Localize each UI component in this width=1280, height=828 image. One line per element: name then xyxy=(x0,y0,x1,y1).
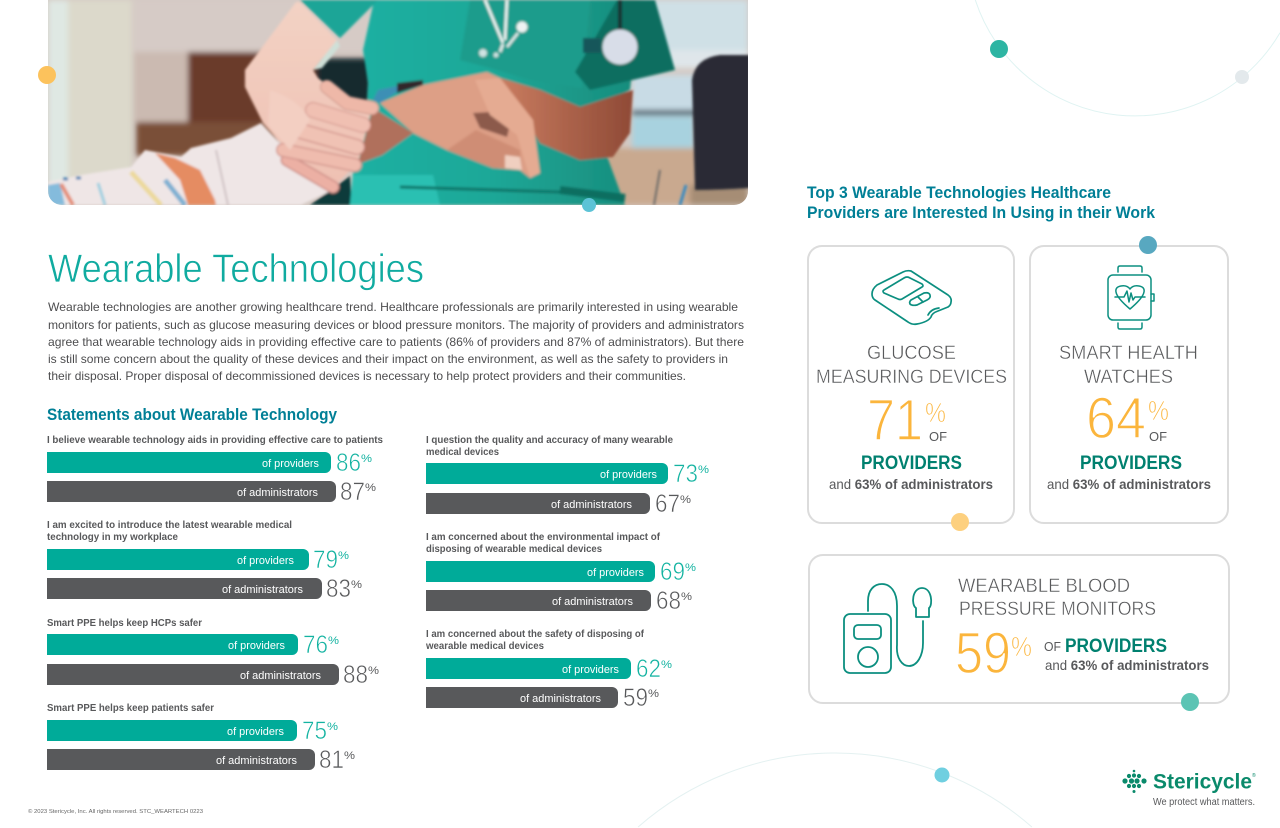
dot: grey xyxy=(1235,70,1249,84)
chart: statement 6: disposing of wearable medical devices xyxy=(426,544,602,555)
logo: Stericycle: Stericycle xyxy=(1153,770,1252,794)
chart: statement 5: 67 xyxy=(655,490,680,518)
intro paragraph: monitors for patients, such as glucose measuring devices or blood pressure monitors. The majority of providers and administrators xyxy=(48,318,744,332)
dot: blue xyxy=(582,198,596,212)
chart: statement 3: 88 xyxy=(343,661,368,689)
decorative arc bottom xyxy=(638,753,1032,827)
chart: statement 3: % xyxy=(328,635,339,647)
dot: teal xyxy=(990,40,1008,58)
chart: statement 2: % xyxy=(338,550,349,562)
dot: teal on card xyxy=(1181,693,1199,711)
panel: smart health watches: WATCHES xyxy=(1084,367,1173,388)
chart: statement 3: of providers xyxy=(228,640,285,652)
chart: statement 4: 81 xyxy=(319,746,344,774)
chart: statement 5: of administrators xyxy=(551,499,632,511)
dot: yellow on card xyxy=(951,513,969,531)
panel: wearable blood pressure monitors: PROVIDERS xyxy=(1065,636,1167,657)
chart: statement 3 xyxy=(47,618,379,689)
chart: statement 6: 69 xyxy=(660,558,685,586)
icon: smart watch xyxy=(1108,266,1154,329)
panel: wearable blood pressure monitors: and 63% of administrators xyxy=(1045,657,1209,673)
chart: statement 6: % xyxy=(681,591,692,603)
label: GLUCOSE xyxy=(867,343,956,364)
panel: glucose measuring devices: MEASURING DEVICES xyxy=(816,367,1007,388)
chart: statement 3: 76 xyxy=(303,631,328,659)
logo: Stericycle: We protect what matters. xyxy=(1153,797,1255,808)
panel: smart health watches: and 63% of administrators xyxy=(1047,476,1211,492)
icon: logo dots xyxy=(1122,770,1147,793)
chart: statement 1: of providers xyxy=(262,458,319,470)
sleeve xyxy=(575,0,675,90)
chart: statement 7 xyxy=(425,629,672,712)
stat: 64%: 64 xyxy=(1086,386,1146,451)
chart: statement 6: of providers xyxy=(587,567,644,579)
chart: statement 5: medical devices xyxy=(426,447,499,458)
stat: 64%: % xyxy=(1148,395,1169,426)
chart: statement 5: 73 xyxy=(673,460,698,488)
heading: top 3 wearable technologies xyxy=(807,184,1156,222)
chart: statement 6: I am concerned about the environmental impact of xyxy=(426,532,661,543)
chart: statement 1: % xyxy=(361,453,372,465)
chart: statement 7: 62 xyxy=(636,655,661,683)
blanket xyxy=(48,123,333,205)
footer copyright: © 2023 Stericycle, Inc. All rights reserved. STC_WEARTECH 0223 xyxy=(28,808,203,815)
panel: wearable blood pressure monitors xyxy=(809,555,1229,703)
intro paragraph: Wearable technologies are another growing healthcare trend. Healthcare professionals are primarily interested in using wearable xyxy=(48,300,738,314)
chair xyxy=(692,55,750,190)
chart: statement 5: % xyxy=(698,464,709,476)
stat: 71%: 71 xyxy=(867,388,923,453)
dark base under scrubs xyxy=(310,176,352,205)
chart: statement 6: 68 xyxy=(656,587,681,615)
chart: statement 4: % xyxy=(327,721,338,733)
stat: 59%: 59 xyxy=(955,621,1011,686)
chart: statement 3: of administrators xyxy=(240,670,321,682)
intro paragraph xyxy=(48,300,744,383)
chart: statement 5 xyxy=(426,435,709,518)
intro paragraph: is still some concern about the quality of these devices and their impact on the environment, as well as the safety to providers in xyxy=(48,352,728,366)
chart: statement 3: Smart PPE helps keep HCPs safer xyxy=(47,618,202,629)
chart: statement 7: of administrators xyxy=(520,693,601,705)
chart: statement 2: technology in my workplace xyxy=(47,532,178,543)
label: WEARABLE BLOOD xyxy=(958,576,1130,597)
chart: statement 5: % xyxy=(680,494,691,506)
panel: wearable blood pressure monitors: PRESSURE MONITORS xyxy=(959,599,1156,620)
chart: statement 2: % xyxy=(351,579,362,591)
arm left xyxy=(245,2,372,188)
logo: Stericycle xyxy=(1122,770,1256,808)
chart: statement 4 xyxy=(47,703,355,774)
chart: statement 4: of providers xyxy=(227,726,284,738)
decorative arc top right xyxy=(975,0,1280,116)
panel: smart health watches: PROVIDERS xyxy=(1080,453,1182,474)
stat: 64%: OF xyxy=(1149,429,1167,444)
smart watch band xyxy=(397,80,423,93)
fingers left hand xyxy=(283,87,372,187)
chart: statement 7: wearable medical devices xyxy=(425,641,544,652)
stat: 71%: % xyxy=(925,397,946,428)
dot: blue on card xyxy=(1139,236,1157,254)
chart: statement 4: 75 xyxy=(302,717,327,745)
chart: statement 2: I am excited to introduce the latest wearable medical xyxy=(47,520,292,531)
title: Wearable Technologies xyxy=(48,247,424,291)
stethoscope xyxy=(485,0,507,43)
chart: statement 4: of administrators xyxy=(216,755,297,767)
icon: blood pressure monitor xyxy=(844,584,931,673)
chart: statement 6 xyxy=(426,532,696,615)
chart: statement 1: I believe wearable technology aids in providing effective care to patients xyxy=(47,435,383,446)
forearm right xyxy=(500,78,633,160)
dot: orange xyxy=(38,66,56,84)
chart: statement 1: % xyxy=(365,482,376,494)
chart: statement 7: % xyxy=(661,659,672,671)
chart: statement 2: of administrators xyxy=(222,584,303,596)
label: SMART HEALTH xyxy=(1059,343,1198,364)
chart: statement 4: Smart PPE helps keep patients safer xyxy=(47,703,214,714)
chart: statement 2 xyxy=(47,520,362,603)
intro paragraph: agree that wearable technology aids in providing effective care to patients (86% of providers and 87% of administrators). But there xyxy=(48,335,744,349)
intro paragraph: their disposal. Proper disposal of decommissioned devices is necessary to help protect providers and their communities. xyxy=(48,369,686,383)
photo: nurse adjusting a smart watch xyxy=(48,0,750,205)
chart: statement 6: % xyxy=(685,562,696,574)
chart: statement 4: % xyxy=(344,750,355,762)
panel: glucose measuring devices: PROVIDERS xyxy=(861,453,962,474)
wrist shadow xyxy=(358,108,413,164)
scrubs xyxy=(348,0,633,205)
heading: statements: Statements about Wearable Technology xyxy=(47,406,338,424)
panel: wearable blood pressure monitors: OF xyxy=(1044,639,1061,654)
chart: statement 5: I question the quality and accuracy of many wearable xyxy=(426,435,673,446)
stat: 71%: OF xyxy=(929,429,947,444)
panel: smart health watches xyxy=(1030,246,1228,523)
heading: top 3 wearable technologies: Providers are Interested In Using in their Work xyxy=(807,204,1156,222)
chart: statement 1 xyxy=(47,435,383,506)
chart: statement 3: % xyxy=(368,665,379,677)
chart: statement 6: of administrators xyxy=(552,596,633,608)
stat: 59%: % xyxy=(1011,631,1032,662)
panel: glucose measuring devices: and 63% of administrators xyxy=(829,476,993,492)
chart: statement 2: 83 xyxy=(326,575,351,603)
chart: statement 2: of providers xyxy=(237,555,294,567)
logo: Stericycle: ® xyxy=(1252,772,1256,779)
chart: statement 7: 59 xyxy=(623,684,648,712)
panel: glucose measuring devices xyxy=(808,246,1014,523)
chart: statement 1: 87 xyxy=(340,478,365,506)
heading: top 3 wearable technologies: Top 3 Wearable Technologies Healthcare xyxy=(807,184,1111,202)
chart: statement 7: of providers xyxy=(562,664,619,676)
right hand xyxy=(380,72,540,178)
dot: blue on arc xyxy=(934,768,950,782)
chart: statement 1: of administrators xyxy=(237,487,318,499)
icon: glucose meter xyxy=(872,271,951,324)
chart: statement 2: 79 xyxy=(313,546,338,574)
chart: statement 1: 86 xyxy=(336,449,361,477)
chart: statement 5: of providers xyxy=(600,469,657,481)
chart: statement 7: % xyxy=(648,688,659,700)
chart: statement 7: I am concerned about the safety of disposing of xyxy=(426,629,645,640)
